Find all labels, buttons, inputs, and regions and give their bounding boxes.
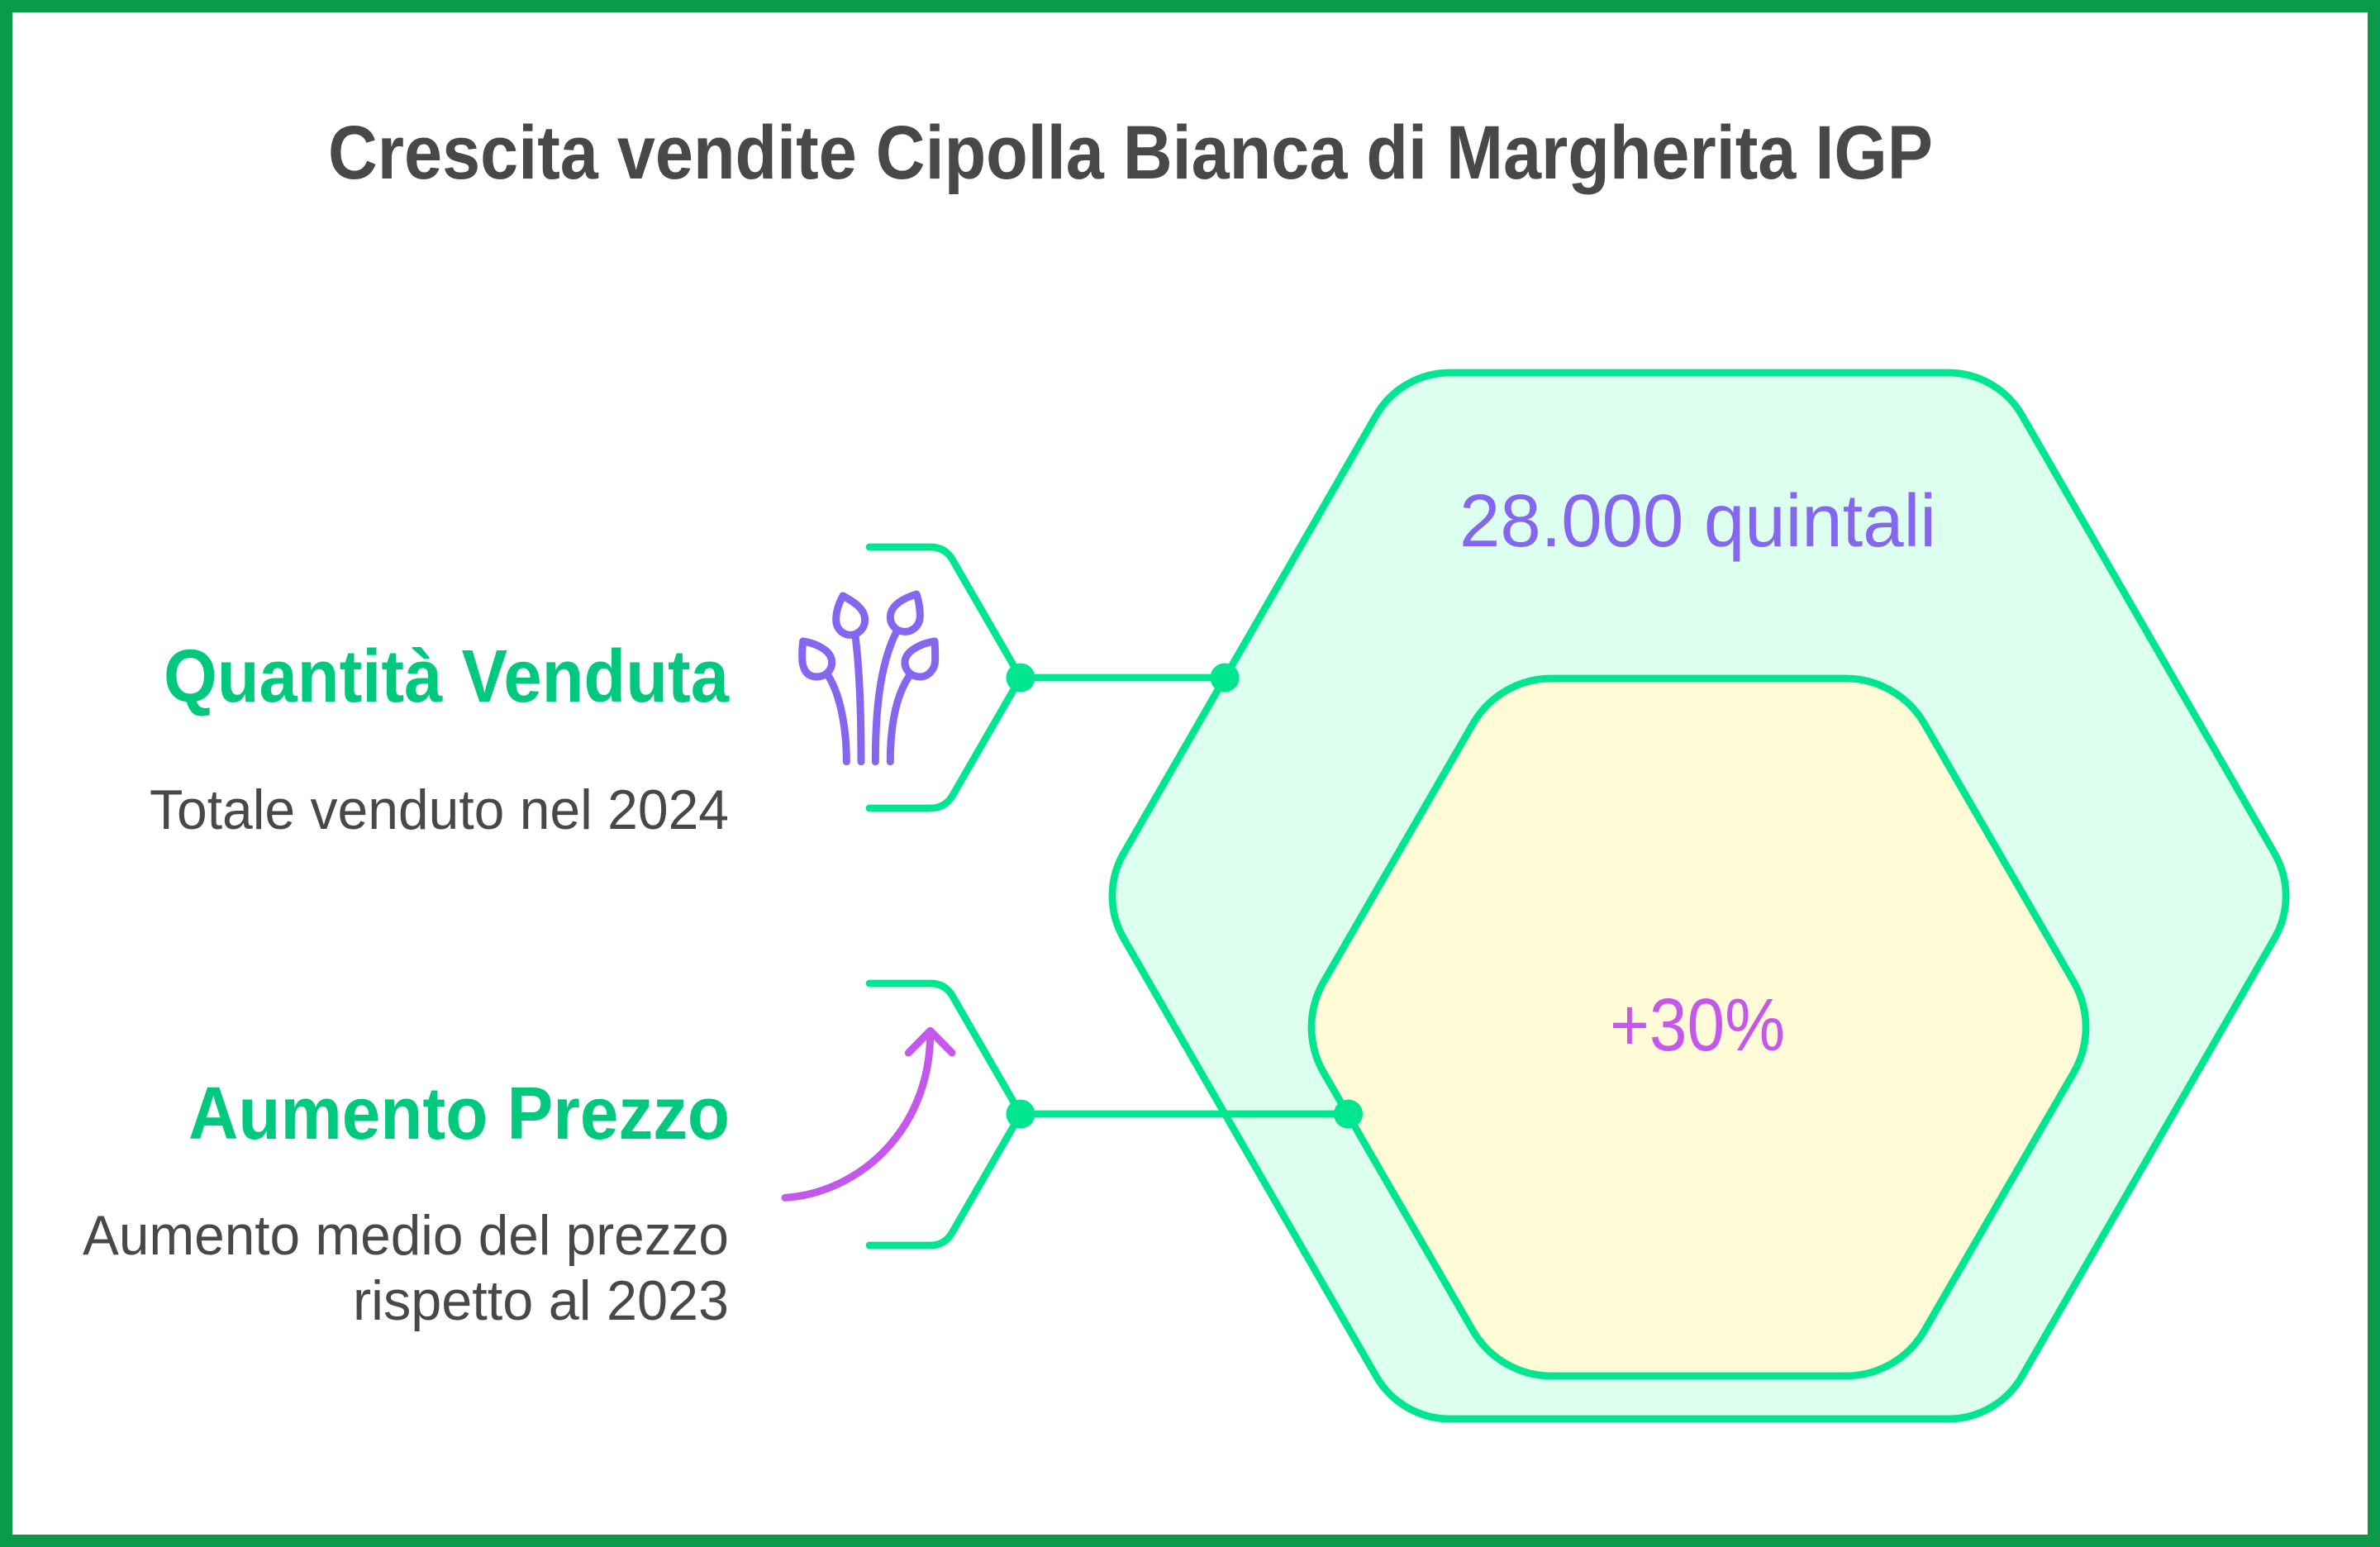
description: average price increase: Aumento medio del prezzo — [83, 1204, 729, 1267]
description: average price increase — [83, 1204, 729, 1332]
title: Crescita vendite Cipolla Bianca di Margherita IGP — [328, 111, 1933, 195]
description: total sold: Totale venduto nel 2024 — [150, 778, 729, 841]
value: 28.000 quintali: 28.000 quintali — [1459, 480, 1936, 563]
value: +30%: +30% — [1610, 984, 1785, 1067]
label: Aumento Prezzo: Aumento Prezzo — [188, 1073, 730, 1155]
inner hexagon: price increase — [1311, 678, 2086, 1376]
connector: quantity bracket to outer hexagon — [869, 547, 1240, 808]
label: Quantità Venduta — [150, 635, 730, 841]
description: average price increase: rispetto al 2023 — [353, 1269, 729, 1332]
label: Aumento Prezzo — [83, 1073, 730, 1332]
icon: onion sprouts — [802, 594, 935, 762]
icon: rising arrow — [785, 1031, 952, 1197]
connector: price bracket to inner hexagon — [869, 983, 1363, 1245]
label: Quantità Venduta: Quantità Venduta — [164, 635, 730, 718]
